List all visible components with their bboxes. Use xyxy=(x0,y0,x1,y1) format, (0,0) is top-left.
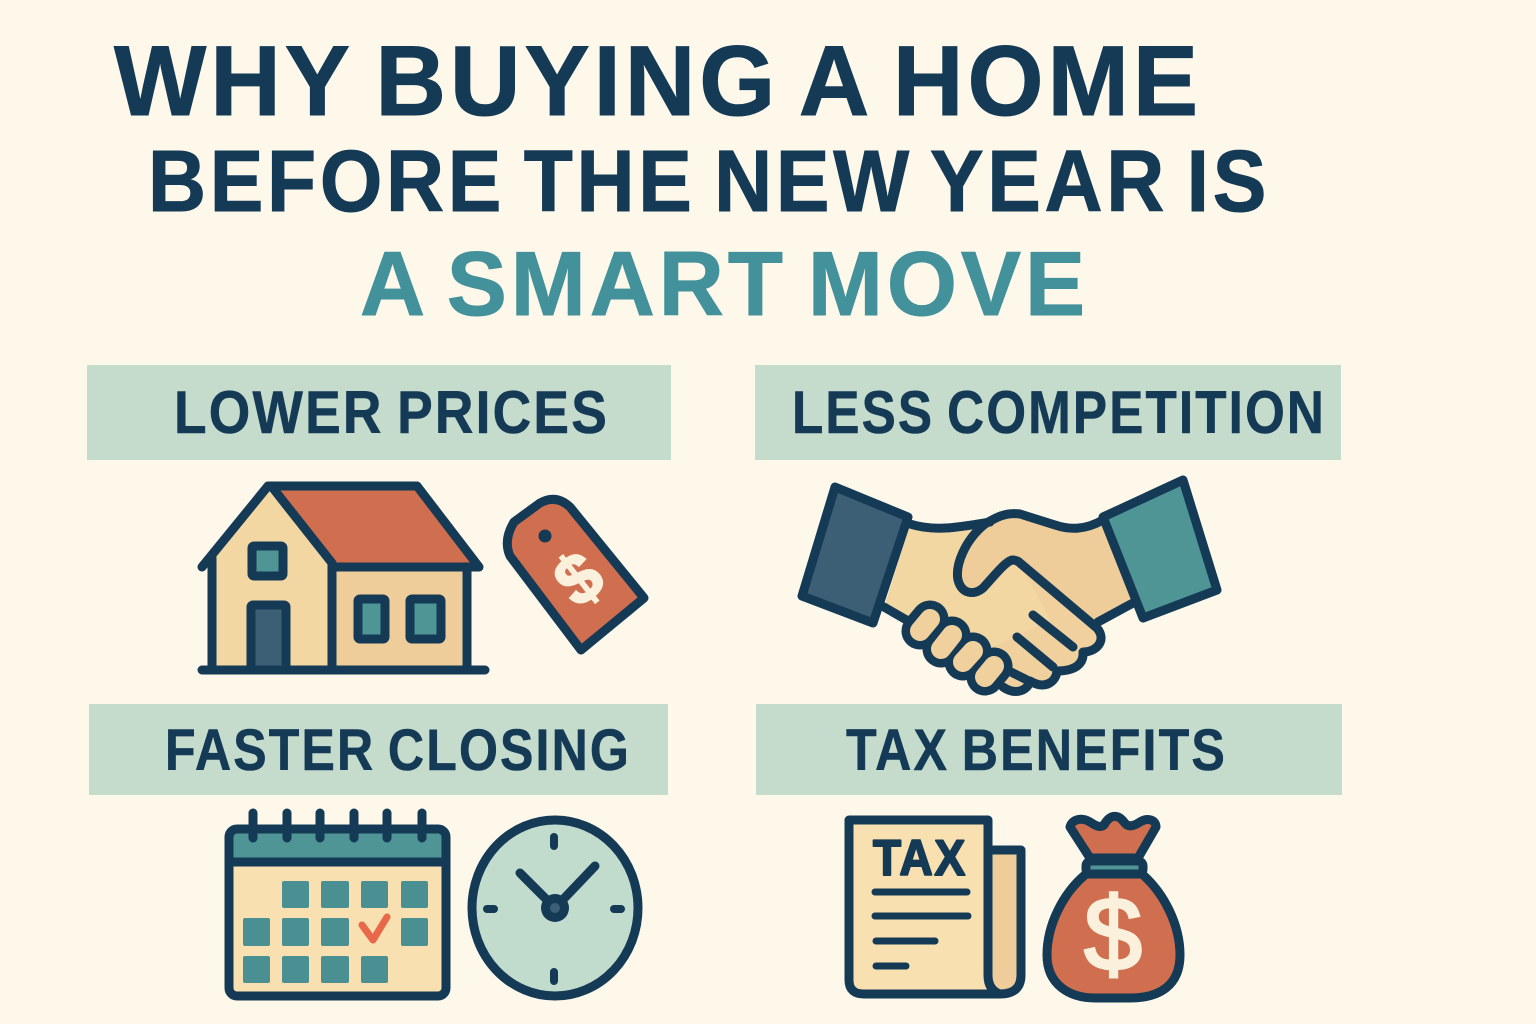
heading band: faster closing xyxy=(89,704,668,795)
heading band: tax benefits xyxy=(756,704,1342,795)
heading band: less competition: LESS COMPETITION xyxy=(792,379,1326,446)
icon: house xyxy=(202,486,485,670)
left cuff xyxy=(802,487,908,623)
icon: price tag: $ xyxy=(539,536,618,622)
title: A SMART MOVE xyxy=(360,234,1089,335)
icon: calendar xyxy=(229,813,446,996)
panel: less competition xyxy=(755,365,1341,691)
icon: money bag: $ xyxy=(1084,877,1142,993)
right cuff xyxy=(1103,480,1217,618)
panel: lower prices xyxy=(87,365,671,670)
icon: money bag xyxy=(1047,816,1180,998)
title: WHY BUYING A HOME xyxy=(114,25,1202,136)
heading band: lower prices: LOWER PRICES xyxy=(174,379,609,446)
panel: tax benefits xyxy=(756,704,1342,998)
heading band: faster closing: FASTER CLOSING xyxy=(165,718,631,783)
heading band: lower prices xyxy=(87,365,671,460)
calendar check mark xyxy=(362,917,387,940)
heading band: tax benefits: TAX BENEFITS xyxy=(846,718,1227,783)
icon: tax document: TAX xyxy=(873,830,967,886)
panel: faster closing xyxy=(89,704,668,996)
title: BEFORE THE NEW YEAR IS xyxy=(148,133,1270,230)
icon: price tag xyxy=(507,499,644,650)
title xyxy=(114,25,1270,335)
fingers xyxy=(920,619,994,677)
icon: handshake xyxy=(802,480,1217,691)
heading band: less competition xyxy=(755,365,1341,460)
calendar day squares xyxy=(243,881,428,983)
icon: tax document xyxy=(849,820,1021,994)
icon: clock xyxy=(472,820,638,996)
